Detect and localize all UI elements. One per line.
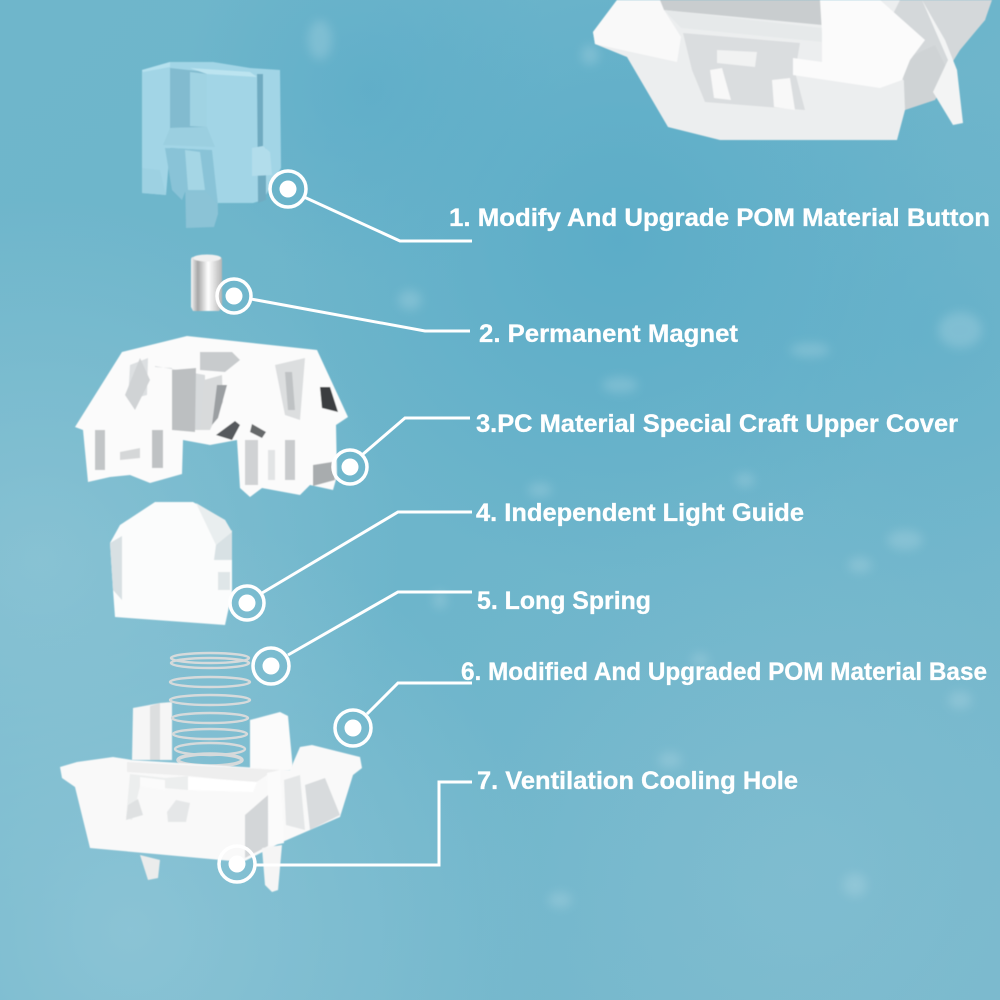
stem: blue POM button	[142, 62, 281, 228]
label 4: 4. Independent Light Guide	[476, 499, 804, 527]
label 3: 3.PC Material Special Craft Upper Cover	[476, 410, 958, 438]
magnet	[191, 254, 222, 311]
switch base: towers	[132, 702, 293, 775]
top right switch base (cropped)	[593, 0, 992, 140]
label 1: 1. Modify And Upgrade POM Material Button	[449, 204, 990, 232]
label 7: 7. Ventilation Cooling Hole	[477, 767, 798, 795]
callout lines	[251, 197, 472, 865]
transparent upper cover	[75, 336, 348, 497]
callout markers	[217, 171, 371, 882]
label 6: 6. Modified And Upgraded POM Material Base	[461, 658, 987, 686]
switch base: body	[60, 745, 362, 892]
light guide	[110, 502, 232, 625]
long spring	[170, 653, 250, 766]
label 5: 5. Long Spring	[477, 587, 651, 615]
label 2: 2. Permanent Magnet	[479, 320, 739, 348]
